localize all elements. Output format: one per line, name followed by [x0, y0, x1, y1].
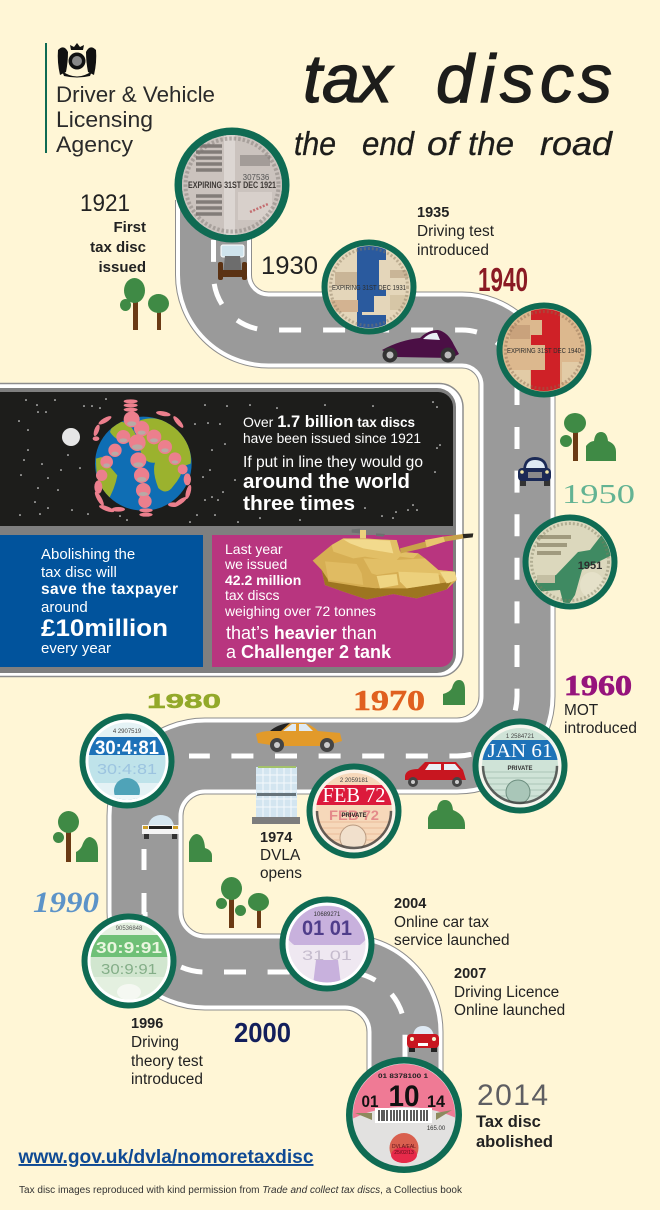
- label: 1974 DVLA opens: opens: [260, 865, 302, 882]
- panel: saving: tax disc will: [41, 564, 117, 581]
- text: around the world: three times: [243, 493, 355, 515]
- label: 1960 MOT: introduced: [564, 720, 637, 737]
- label: 2014 tax disc abolished: abolished: [476, 1133, 553, 1151]
- panel: world facts: have been issued since 1921: [243, 431, 421, 446]
- label: 1935 driving test: 1935: [417, 205, 449, 221]
- label: 2007 driving licence: Driving Licence: [454, 984, 559, 1001]
- label: 1935 driving test: introduced: [417, 242, 489, 259]
- icon: moon: [62, 428, 80, 446]
- label: 1921 first tax disc: [80, 190, 146, 276]
- panel: tank comparison: weighing over 72 tonnes: [224, 603, 376, 619]
- label: 2014 tax disc abolished: Tax disc: [476, 1113, 541, 1131]
- label: 1996 theory test: theory test: [131, 1053, 204, 1070]
- icon: royal crest: [58, 43, 96, 78]
- tax disc 2004: 01 01: [302, 917, 352, 940]
- tax disc 1950: 1951: [578, 560, 602, 572]
- label: 1921 first tax disc: tax disc: [90, 239, 146, 256]
- label: 1935 driving test: Driving test: [417, 223, 495, 240]
- label: 1974 DVLA opens: 1974: [260, 830, 292, 846]
- tax disc 1930: [322, 240, 416, 340]
- tax disc 1960: [472, 718, 568, 814]
- label: 1921 first tax disc: 1921: [80, 190, 130, 217]
- car: 1970s orange: [256, 723, 342, 752]
- trees and bush: 1980: [53, 811, 98, 862]
- car: 1920s vintage: [218, 245, 247, 280]
- label: 2000: 2000: [234, 1017, 291, 1048]
- label: 1970: 1970: [353, 686, 425, 717]
- tax disc 1980: [80, 714, 174, 808]
- panel: saving: save the taxpayer: [41, 581, 178, 598]
- tax disc 1970: FEB 72: [322, 783, 386, 807]
- label: 1960 MOT: MOT: [564, 702, 599, 719]
- label: 1960 MOT: 1960: [564, 670, 632, 702]
- tax disc 1921: EXPIRING 31ST DEC 1921: [188, 180, 277, 191]
- bush: right of road: [189, 834, 212, 862]
- label: 1980: 1980: [147, 691, 221, 713]
- text: around the world: If put in line they would go: [243, 454, 423, 471]
- title: the: [468, 125, 514, 162]
- text: agency name: Driver & Vehicle: [56, 82, 215, 107]
- trees: 1921: [120, 278, 169, 330]
- label: 2014 tax disc abolished: [476, 1079, 553, 1151]
- tax disc 2014: 10: [388, 1080, 420, 1113]
- label: 1950: 1950: [562, 479, 635, 509]
- car: 1950s navy: [518, 457, 551, 486]
- label: 1996 theory test: introduced: [131, 1071, 203, 1088]
- car: 1980s white: [142, 815, 179, 839]
- tax disc 2014: 25/02/13: [394, 1150, 414, 1156]
- tax disc 1970: FEB 72: [329, 807, 379, 823]
- tax disc 2014: 01: [362, 1092, 378, 1111]
- label: 2004 online car tax: service launched: [394, 932, 510, 949]
- tax disc 1970: 2 2059181: [340, 778, 369, 784]
- title: road: [540, 125, 614, 162]
- tax disc 2014: 14: [427, 1092, 446, 1111]
- tax disc 1980: 30:4:81: [97, 761, 157, 778]
- panel: tank comparison: a Challenger 2 tank: [226, 642, 391, 662]
- tax disc 1970: PRIVATE: [341, 813, 367, 819]
- car: 1960s red mini: [405, 762, 466, 787]
- tax disc 1990: 30:9:91: [101, 961, 157, 978]
- car: 1930s purple: [382, 330, 459, 362]
- trees: 2000: [216, 877, 269, 928]
- road: [144, 200, 517, 1130]
- text: around the world: around the world: [243, 471, 410, 493]
- tax disc 1990: 90536848: [116, 926, 143, 932]
- title: of: [427, 125, 462, 162]
- tax disc 1940: [496, 302, 592, 398]
- panel: saving: every year: [41, 640, 111, 657]
- panel: saving: Abolishing the: [41, 546, 135, 563]
- tax disc 2004: 31 01: [302, 947, 352, 963]
- bush: 1970: [443, 680, 465, 705]
- tax disc 2014: 165.00: [427, 1126, 446, 1132]
- panel: saving: £10million: [41, 615, 168, 642]
- tax disc 1970: [306, 764, 402, 858]
- label: 1921 first tax disc: issued: [98, 259, 146, 276]
- label: 1940: 1940: [478, 261, 528, 298]
- panel: tank comparison: that’s heavier than: [226, 623, 377, 643]
- tax disc 1960: PRIVATE: [507, 766, 533, 772]
- tax disc 1930: EXPIRING 31ST DEC 1931: [332, 283, 406, 292]
- text: discs issued: Over 1.7 billion tax discs: [243, 413, 415, 431]
- label: 2004 online car tax: 2004: [394, 896, 426, 912]
- label: 1921 first tax disc: First: [113, 219, 146, 236]
- label: 1960 MOT: [564, 670, 637, 737]
- tax disc 1960: 1 2584721: [506, 734, 535, 740]
- panel: saving: around: [41, 599, 88, 616]
- tax disc 1960: JAN 61: [488, 740, 552, 762]
- label: 1996 theory test: Driving: [131, 1034, 179, 1051]
- link: website: www.gov.uk/dvla/nomoretaxdisc: [18, 1146, 314, 1168]
- bush: below road: [428, 800, 465, 829]
- tax disc 1950: [522, 514, 618, 610]
- panel: tank comparison: we issued: [224, 556, 287, 572]
- tax disc 2014: 01 8378100 1: [378, 1073, 428, 1080]
- title: tax discs: [303, 41, 612, 117]
- label: 2004 online car tax: Online car tax: [394, 914, 489, 931]
- trees and bush: 1950: [560, 413, 616, 461]
- panel: tank comparison: 42.2 million: [225, 572, 301, 588]
- tax disc 2004: [280, 896, 374, 992]
- tax disc 1980: 4 2907519: [113, 729, 142, 735]
- tax disc 2014: [346, 1057, 462, 1173]
- panel: saving: [0, 535, 203, 667]
- tax disc 2004: 10689271: [314, 912, 341, 918]
- tax disc 1990: 30:9:91: [96, 940, 162, 957]
- tax disc 1921: [174, 128, 290, 242]
- panel: tank comparison: Last year: [225, 541, 283, 557]
- label: 1930: 1930: [261, 252, 318, 280]
- panel: world facts: [0, 392, 453, 526]
- title: the: [294, 125, 336, 162]
- panel: frame: [0, 384, 463, 676]
- car: 2000s red mini: [407, 1026, 439, 1052]
- title: end: [362, 125, 416, 162]
- panel: tank comparison: tax discs: [225, 587, 279, 603]
- icon: DVLA building: [252, 766, 300, 824]
- text: agency name: Licensing: [56, 107, 153, 132]
- label: 1990: 1990: [33, 886, 99, 919]
- tax disc 1921: 307536: [243, 173, 270, 182]
- icon: challenger tank: [313, 529, 473, 599]
- tax disc 1990: [82, 914, 176, 1008]
- title: [294, 41, 614, 162]
- tax disc 1940: EXPIRING 31ST DEC 1940: [507, 346, 581, 355]
- text: agency name: Agency: [56, 132, 133, 157]
- label: 2014 tax disc abolished: 2014: [477, 1079, 548, 1112]
- stars: [19, 399, 440, 522]
- panel: tank comparison: [212, 529, 473, 667]
- label: 2007 driving licence: Online launched: [454, 1002, 565, 1019]
- label: 2007 driving licence: 2007: [454, 966, 486, 982]
- tax disc 1980: 30:4:81: [95, 738, 159, 759]
- tax disc 2014: DVLA/EAL: [392, 1144, 416, 1150]
- label: 1974 DVLA opens: DVLA: [260, 847, 301, 864]
- icon: earth circled by tax discs: [92, 399, 192, 517]
- logo: DVLA: [45, 43, 215, 157]
- footnote: Tax disc images reproduced with kind permission from Trade and collect tax discs, a Collectius book: [19, 1185, 463, 1196]
- label: 1996 theory test: 1996: [131, 1016, 163, 1032]
